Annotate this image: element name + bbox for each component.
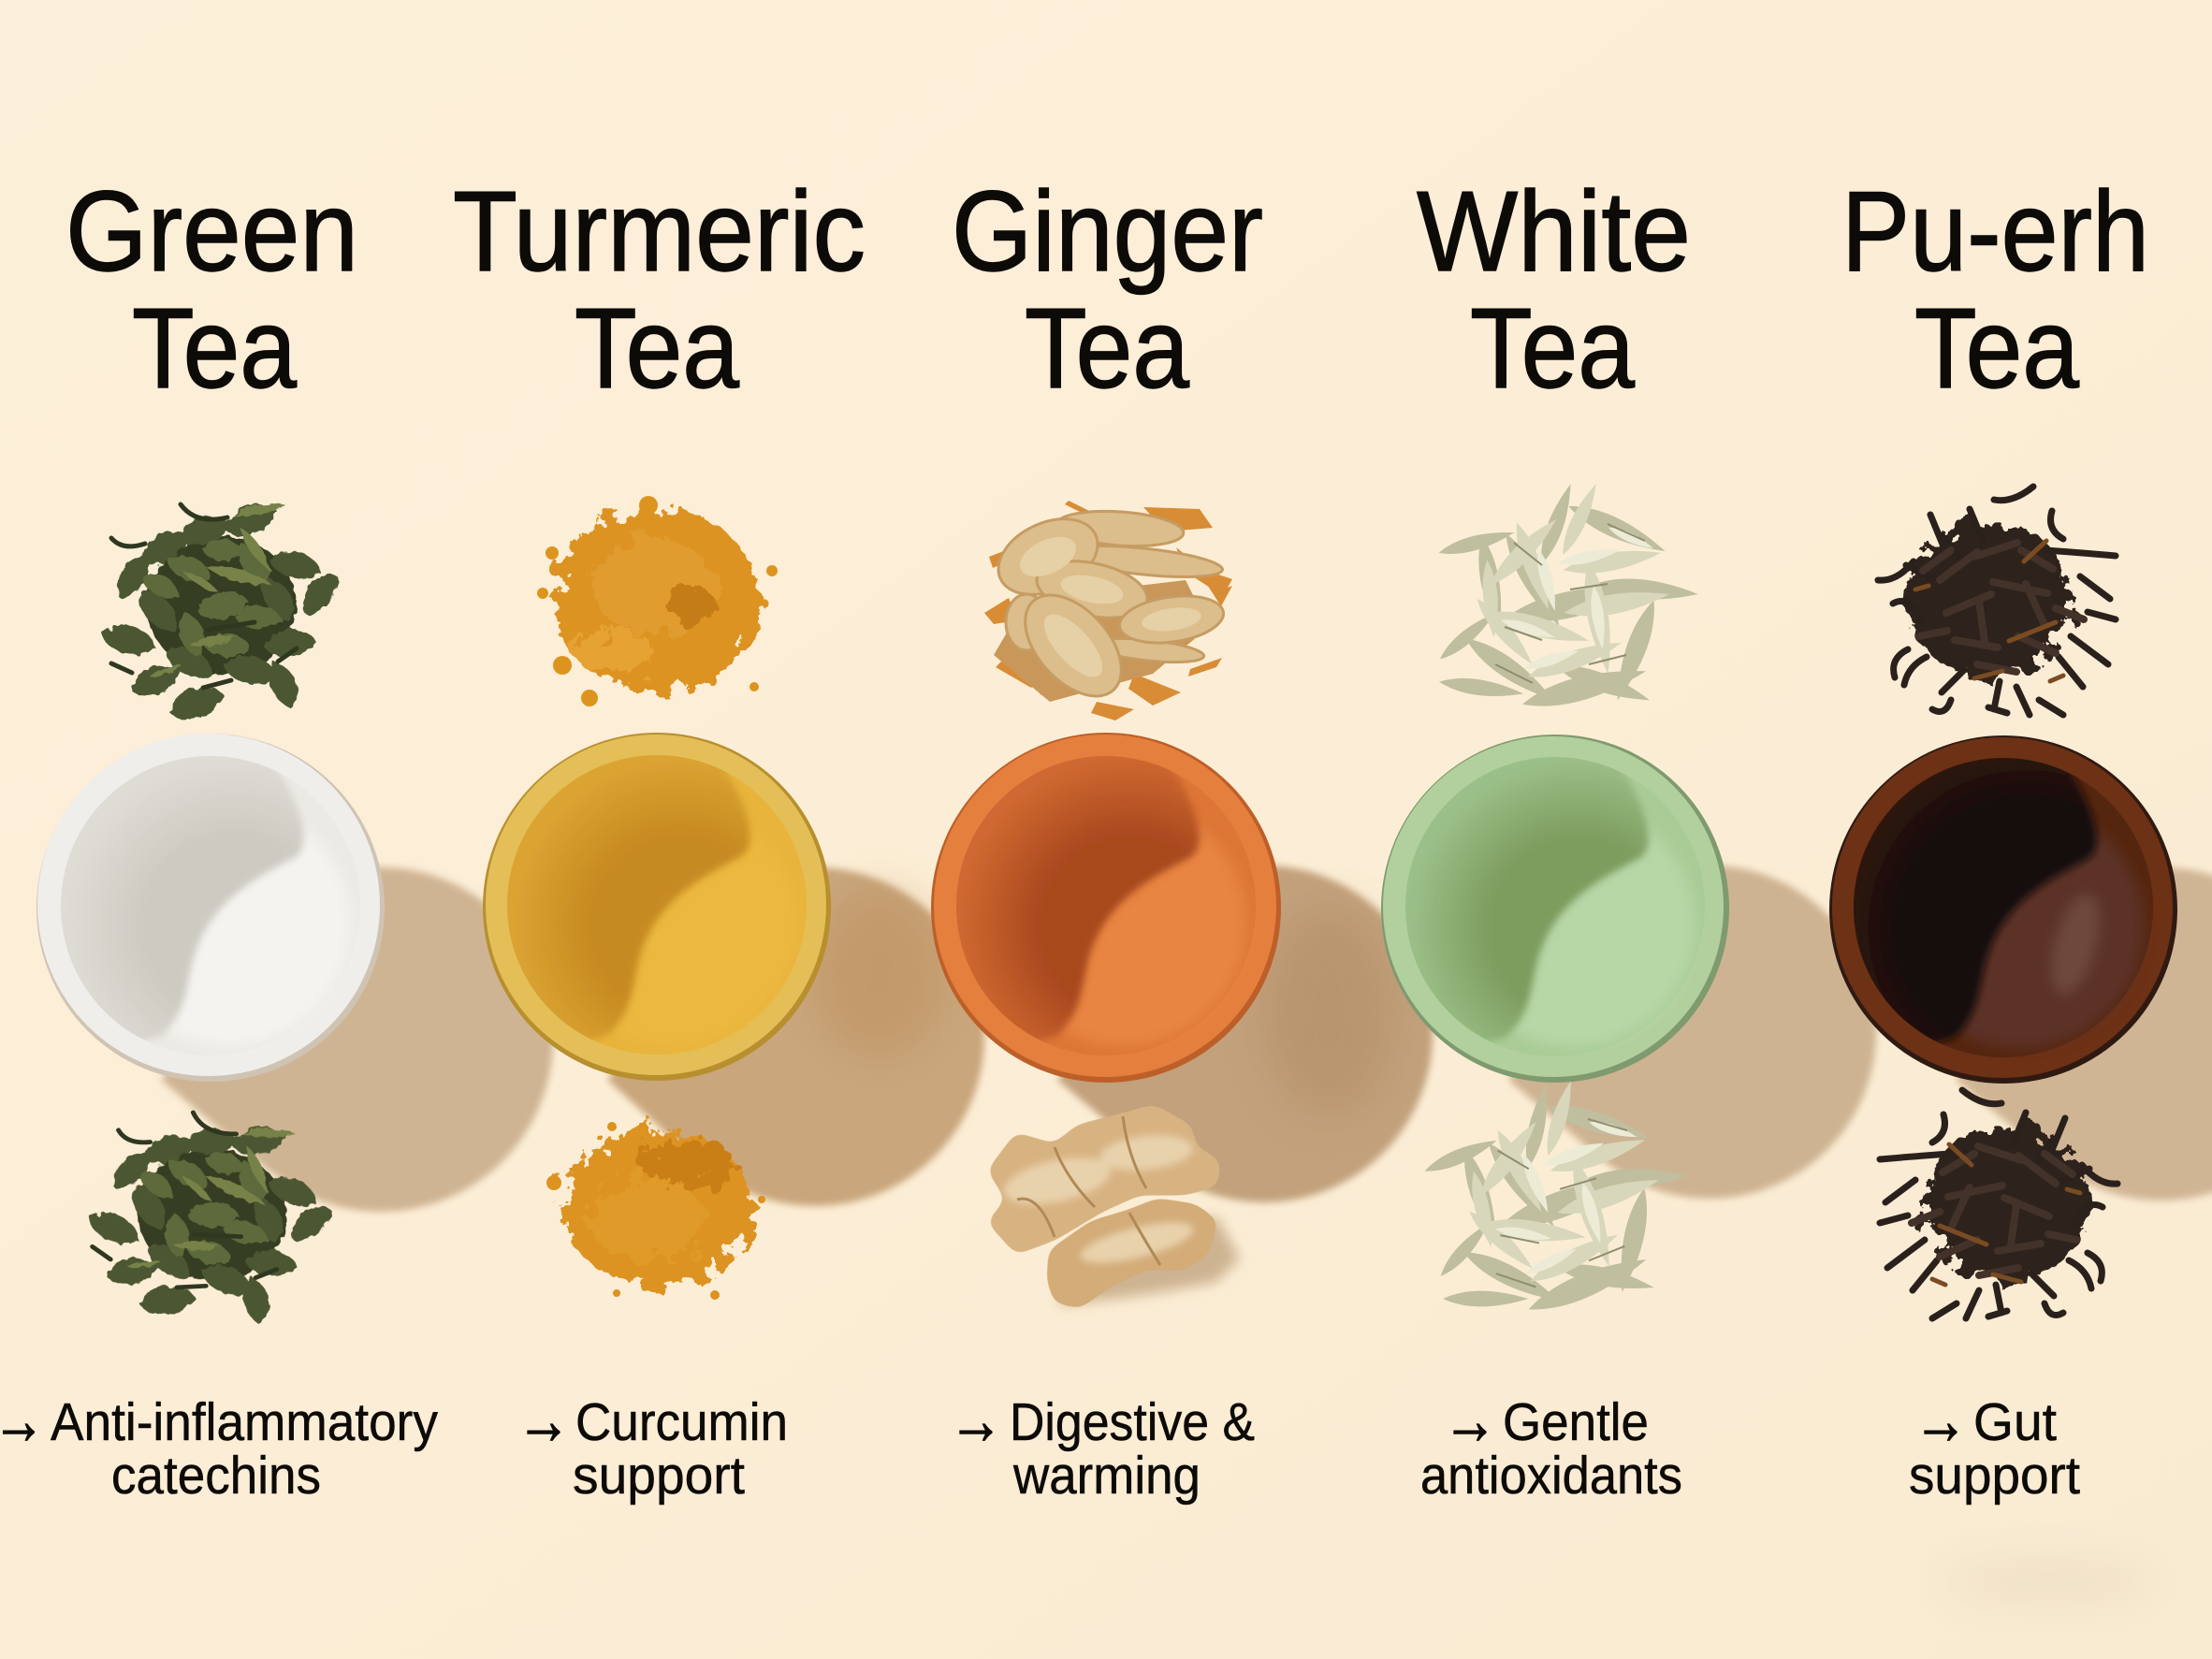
white tea buds, top pile xyxy=(1435,481,1699,716)
title: Pu-erh Tea xyxy=(1841,167,2149,412)
fresh ginger root xyxy=(991,1108,1240,1305)
benefit: turmeric xyxy=(517,1381,788,1506)
title: Turmeric Tea: Tea xyxy=(575,284,739,412)
turmeric powder, top pile xyxy=(537,496,778,706)
benefit: white tea: antioxidants xyxy=(1420,1446,1682,1506)
dried ginger slices xyxy=(984,501,1232,720)
faint smudge bottom right xyxy=(1942,1557,2157,1606)
title: White Tea: White xyxy=(1417,167,1691,295)
benefit: green tea xyxy=(0,1381,438,1506)
benefit: white tea xyxy=(1420,1381,1682,1506)
title: Green Tea: Green xyxy=(65,167,358,295)
title: Turmeric Tea xyxy=(453,167,866,412)
benefit: white tea: Gentle xyxy=(1503,1392,1649,1452)
benefit: green tea: catechins xyxy=(111,1446,321,1506)
cast shadows xyxy=(161,866,2212,1212)
bowl: yellow xyxy=(483,733,831,1081)
benefit: turmeric: Curcumin xyxy=(575,1392,788,1452)
benefit: pu-erh: support xyxy=(1909,1446,2080,1506)
title: White Tea xyxy=(1417,167,1691,412)
benefit: ginger: → xyxy=(949,1381,1003,1459)
benefit: white tea: → xyxy=(1443,1381,1497,1459)
benefit: ginger: warming xyxy=(1012,1446,1201,1506)
title: Pu-erh Tea: Pu-erh xyxy=(1841,167,2149,295)
bowl: orange xyxy=(931,733,1281,1083)
benefit: turmeric: → xyxy=(517,1381,571,1459)
title: Turmeric Tea: Turmeric xyxy=(453,167,866,295)
white tea buds, bottom pile xyxy=(1412,1064,1705,1332)
bowl: white xyxy=(36,734,385,1082)
title: Green Tea: Tea xyxy=(132,284,297,412)
bowl: dark brown xyxy=(1829,735,2177,1084)
pu-erh leaves, bottom pile xyxy=(1880,1090,2117,1318)
bowl: green xyxy=(1381,735,1729,1083)
benefit: turmeric: support xyxy=(573,1446,745,1506)
benefit: ginger xyxy=(949,1381,1255,1506)
benefit: pu-erh xyxy=(1909,1381,2080,1506)
title: Ginger Tea xyxy=(952,167,1263,412)
benefit: pu-erh: → xyxy=(1914,1381,1968,1459)
title: Green Tea xyxy=(65,167,358,412)
title: Pu-erh Tea: Tea xyxy=(1914,284,2079,412)
benefit: green tea: Anti-inflammatory xyxy=(51,1392,438,1452)
benefit: ginger: Digestive & xyxy=(1010,1392,1255,1452)
title: Ginger Tea: Ginger xyxy=(952,167,1263,295)
pu-erh leaves, top pile xyxy=(1878,487,2116,715)
title: Ginger Tea: Tea xyxy=(1025,284,1189,412)
turmeric powder, bottom pile xyxy=(546,1122,765,1300)
benefit: pu-erh: Gut xyxy=(1973,1392,2057,1452)
green tea leaves, bottom pile xyxy=(67,1089,356,1349)
green tea leaves, top pile xyxy=(98,497,345,724)
title: White Tea: Tea xyxy=(1470,284,1635,412)
reflected colour in shadows xyxy=(814,889,1394,1113)
